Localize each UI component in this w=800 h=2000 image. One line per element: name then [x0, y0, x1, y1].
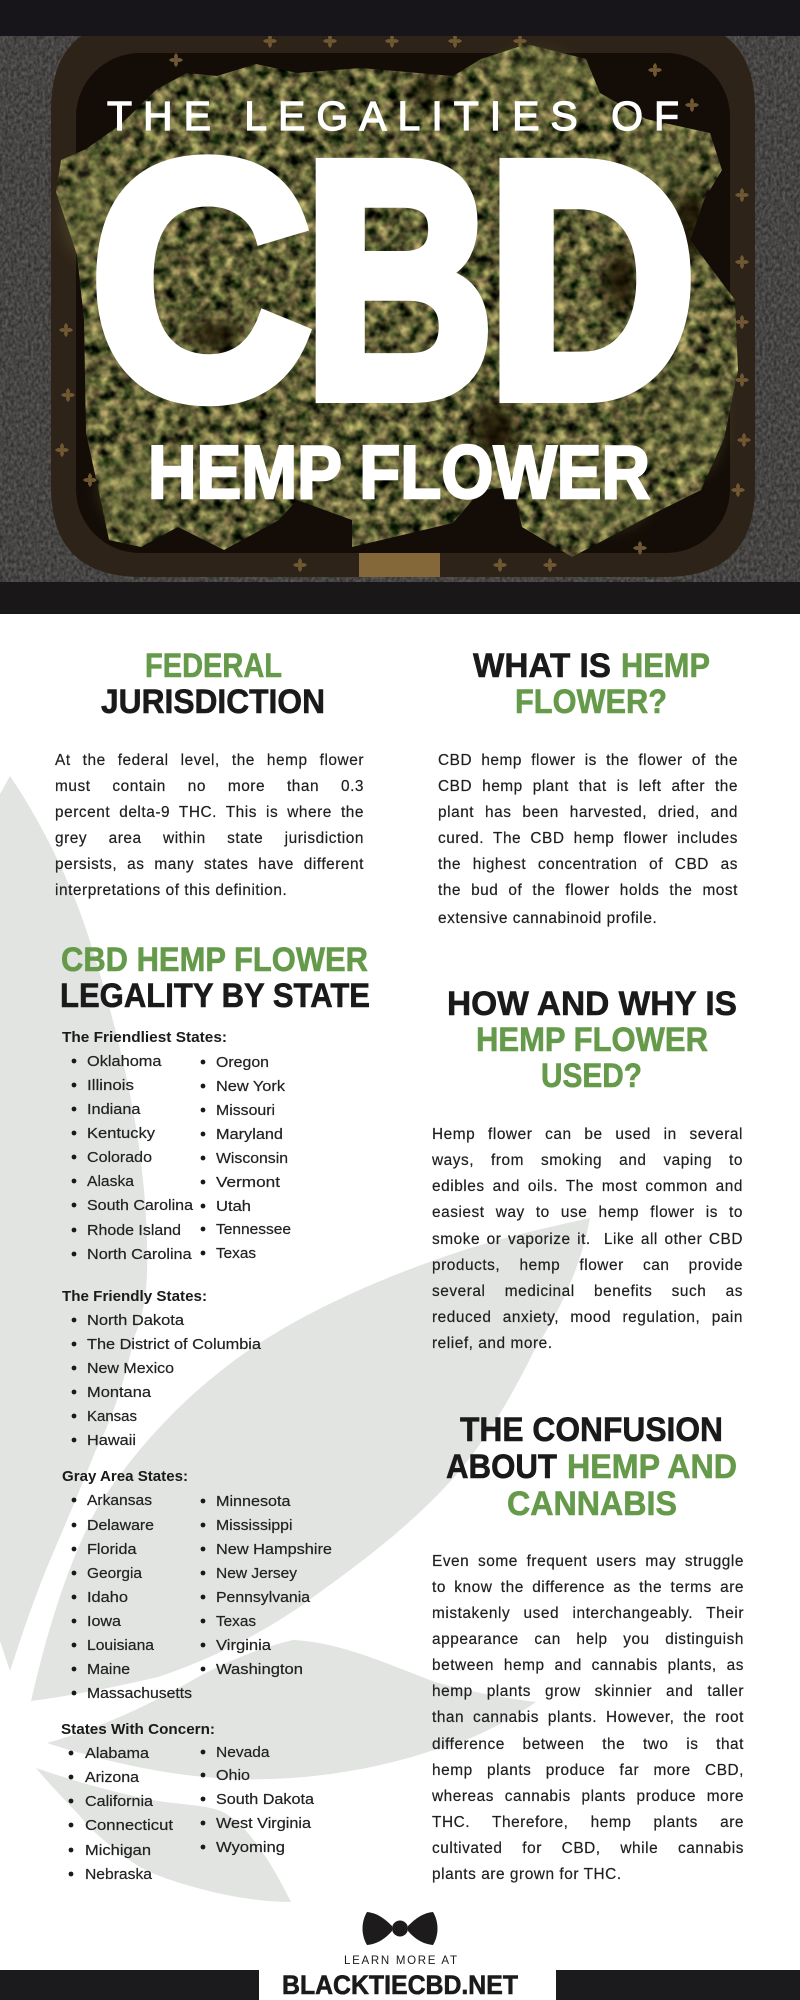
paragraph: how and why: relief, and more.	[432, 1335, 553, 1352]
list: gray area column two: Mississippi	[216, 1518, 292, 1534]
title: CBD: B	[304, 93, 494, 468]
list: friendliest column one: South Carolina	[87, 1198, 194, 1214]
heading: what is hemp flower	[473, 647, 710, 721]
paragraph: the confusion: between hemp and cannabis plants, as	[432, 1657, 744, 1674]
heading: what is hemp flower: WHAT IS	[473, 647, 611, 685]
list: friendliest column two: Utah	[216, 1199, 251, 1215]
list: friendliest column one: Indiana	[87, 1102, 141, 1118]
footer bar: right	[556, 1970, 800, 2000]
paragraph: federal jurisdiction: At the federal level, the hemp flower	[55, 752, 364, 768]
heading: the confusion: ABOUT	[446, 1448, 557, 1486]
list: friendliest column two: New York	[216, 1079, 286, 1095]
bottom hero black bar	[0, 582, 800, 614]
leaf: lower right	[47, 1640, 536, 1779]
paragraph: how and why: Hemp flower can be used in several	[432, 1126, 743, 1143]
subheading: gray area states: Gray Area States:	[62, 1469, 188, 1485]
list: friendliest column two: Oregon	[216, 1055, 269, 1071]
list: friendliest column two: Missouri	[216, 1103, 275, 1119]
list: friendliest column one: Alaska	[87, 1174, 135, 1190]
paragraph: the confusion: mistakenly used interchangeably. Their	[432, 1605, 744, 1622]
list: friendliest column two	[201, 1055, 291, 1262]
paragraph: how and why	[432, 1126, 743, 1352]
list: gray area column two: Washington	[216, 1662, 303, 1678]
heading: the confusion: CANNABIS	[507, 1485, 677, 1523]
list: gray area column two: Pennsylvania	[216, 1590, 311, 1606]
heading: federal jurisdiction: FEDERAL	[145, 647, 282, 685]
paragraph: the confusion: hemp plants produce far more CBD,	[432, 1762, 744, 1779]
list: gray area column one: Idaho	[87, 1590, 128, 1606]
subheading: states with concern: States With Concern:	[61, 1722, 215, 1738]
list: concern column one	[69, 1746, 173, 1883]
list: concern column two: Nevada	[216, 1745, 270, 1761]
top black bar	[0, 0, 800, 36]
heading: how and why: HOW AND WHY IS	[447, 985, 737, 1023]
list: friendliest column two: Texas	[216, 1246, 256, 1262]
list: friendliest column two: Wisconsin	[216, 1151, 288, 1167]
list: gray area column one: Delaware	[87, 1518, 154, 1534]
list: friendliest column one: Illinois	[87, 1078, 134, 1094]
paragraph: federal jurisdiction	[54, 752, 364, 899]
heading: legality by state	[60, 941, 370, 1015]
list: concern column two: Ohio	[216, 1768, 250, 1784]
paragraph: the confusion: plants are grown for THC.	[432, 1866, 622, 1883]
list: friendly states: North Dakota	[87, 1313, 185, 1329]
title: hemp flower: HEMP FLOWER	[148, 430, 650, 514]
list: friendliest column two: Tennessee	[216, 1222, 291, 1238]
list: gray area column one: Iowa	[87, 1614, 122, 1630]
subheading: friendliest states: The Friendliest States:	[62, 1030, 227, 1046]
paragraph: how and why: reduced anxiety, mood regulation, pain	[432, 1309, 743, 1326]
paragraph: federal jurisdiction: grey area within state jurisdiction	[55, 830, 364, 847]
footer bar: left	[0, 1970, 259, 2000]
list: gray area column one: Arkansas	[87, 1493, 152, 1509]
list: friendliest column one: North Carolina	[87, 1247, 193, 1263]
paragraph: the confusion: THC. Therefore, hemp plants are	[432, 1814, 744, 1831]
list: friendly states: Kansas	[87, 1409, 137, 1425]
paragraph: what is hemp flower: CBD hemp plant that is left after the	[438, 778, 738, 795]
heading: federal jurisdiction: JURISDICTION	[101, 683, 325, 721]
list: gray area column one: Maine	[87, 1662, 130, 1678]
list: friendliest column one: Colorado	[87, 1150, 152, 1166]
paragraph: the confusion: Even some frequent users may struggle	[432, 1552, 744, 1570]
list: friendliest column one	[72, 1054, 194, 1263]
leaf: left	[0, 776, 147, 1671]
title: CBD	[90, 93, 697, 468]
list: friendliest column two: Maryland	[216, 1127, 283, 1143]
list: concern column one: Alabama	[85, 1746, 150, 1762]
paragraph: how and why: easiest way to use hemp flower is to	[432, 1204, 743, 1221]
heading: what is hemp flower: HEMP	[621, 647, 710, 685]
paragraph: the confusion: appearance can help you distinguish	[432, 1631, 744, 1648]
heading: the confusion	[446, 1411, 737, 1523]
list: concern column one: Michigan	[85, 1843, 151, 1859]
paragraph: the confusion: cultivated for CBD, while cannabis	[432, 1840, 744, 1857]
list: concern column one: Connecticut	[85, 1818, 173, 1834]
list: concern column two: South Dakota	[216, 1792, 315, 1808]
list: concern column one: California	[85, 1794, 154, 1810]
paragraph: how and why: edibles and oils. The most common and	[432, 1178, 743, 1195]
photo: hemp buds	[50, 40, 750, 570]
content text layer	[0, 647, 800, 2000]
list: friendly states: The District of Columbia	[87, 1337, 262, 1353]
paragraph: how and why: products, hemp flower can provide	[432, 1257, 743, 1274]
list: concern column two	[201, 1745, 315, 1856]
paragraph: federal jurisdiction: must contain no more than 0.3	[55, 778, 364, 795]
list: gray area column one: Louisiana	[87, 1638, 155, 1654]
list: friendliest column one: Oklahoma	[87, 1054, 162, 1070]
paragraph: how and why: smoke or vaporize it. Like all other CBD	[432, 1231, 743, 1248]
list: gray area column two	[201, 1494, 332, 1678]
paragraph: federal jurisdiction: interpretations of this definition.	[55, 882, 287, 899]
title: the legalities of: THE LEGALITIES OF	[107, 93, 679, 139]
paragraph: how and why: several medicinal benefits such as	[432, 1283, 743, 1300]
heading: legality by state: LEGALITY BY STATE	[60, 977, 370, 1015]
icon: bow tie	[362, 1912, 438, 1945]
paragraph: how and why: ways, from smoking and vaping to	[432, 1152, 743, 1169]
paragraph: what is hemp flower: the bud of the flower holds the most	[438, 882, 738, 899]
list: gray area column one: Massachusetts	[87, 1686, 192, 1702]
paragraph: what is hemp flower: plant has been harvested, dried, and	[438, 804, 738, 821]
photo: tray tag	[359, 553, 440, 577]
footer label: learn more at: LEARN MORE AT	[344, 1955, 457, 1967]
title: CBD: C	[90, 93, 312, 468]
heading: how and why: HEMP FLOWER	[476, 1021, 708, 1059]
list: friendly states: New Mexico	[87, 1361, 174, 1377]
list: gray area column two: New Hampshire	[216, 1542, 332, 1558]
heading: the confusion: HEMP AND	[567, 1448, 737, 1486]
list: concern column one: Arizona	[85, 1770, 140, 1786]
list: gray area column two: Minnesota	[216, 1494, 291, 1510]
heading: what is hemp flower: FLOWER?	[515, 683, 667, 721]
paragraph: federal jurisdiction: persists, as many states have different	[55, 856, 364, 873]
list: gray area column one	[72, 1493, 192, 1702]
list: friendliest column two: Vermont	[216, 1175, 280, 1191]
photo: tray	[51, 20, 755, 577]
heading: the confusion: THE CONFUSION	[460, 1411, 723, 1449]
title: CBD: D	[486, 93, 697, 468]
leaf: lower	[36, 1768, 291, 1902]
paragraph: what is hemp flower: extensive cannabinoid profile.	[438, 910, 657, 927]
paragraph: the confusion: whereas cannabis plants produce more	[432, 1788, 744, 1805]
list: friendliest column one: Kentucky	[87, 1126, 156, 1142]
paragraph: what is hemp flower: the highest concentration of CBD as	[438, 856, 738, 873]
list: gray area column two: Texas	[216, 1614, 256, 1630]
paragraph: federal jurisdiction: percent delta-9 THC. This is where the	[55, 804, 364, 821]
leaf: diagonal	[31, 1218, 590, 1701]
heading: how and why	[447, 985, 737, 1095]
paragraph: the confusion: difference between the two is that	[432, 1736, 744, 1753]
subheading: friendly states: The Friendly States:	[62, 1289, 207, 1305]
list: friendly states: Hawaii	[87, 1433, 136, 1449]
paragraph: what is hemp flower	[438, 752, 738, 927]
background leaf graphic	[0, 776, 590, 1902]
list: friendly states: Montana	[87, 1385, 152, 1401]
list: gray area column one: Georgia	[87, 1566, 143, 1582]
photo: stone table	[0, 20, 800, 582]
heading: how and why: USED?	[541, 1057, 642, 1095]
list: friendliest column one: Rhode Island	[87, 1223, 181, 1239]
heading: legality by state: CBD HEMP FLOWER	[61, 941, 368, 979]
paragraph: what is hemp flower: CBD hemp flower is the flower of the	[438, 752, 738, 768]
list: concern column two: West Virginia	[216, 1816, 312, 1832]
footer url: BLACKTIECBD.NET	[282, 1970, 518, 2000]
list: friendly states	[72, 1313, 262, 1449]
list: gray area column one: Florida	[87, 1542, 137, 1558]
paragraph: the confusion: than cannabis plants. However, the root	[432, 1709, 744, 1726]
list: concern column one: Nebraska	[85, 1867, 153, 1883]
paragraph: the confusion: hemp plants grow skinnier and taller	[432, 1683, 744, 1700]
paragraph: the confusion: to know the difference as the terms are	[432, 1579, 744, 1596]
list: concern column two: Wyoming	[216, 1840, 285, 1856]
list: gray area column two: New Jersey	[216, 1566, 298, 1582]
list: gray area column two: Virginia	[216, 1638, 272, 1654]
heading: federal jurisdiction	[101, 647, 325, 721]
paragraph: what is hemp flower: cured. The CBD hemp flower includes	[438, 830, 738, 847]
paragraph: the confusion	[432, 1552, 744, 1883]
hero banner	[0, 0, 800, 614]
